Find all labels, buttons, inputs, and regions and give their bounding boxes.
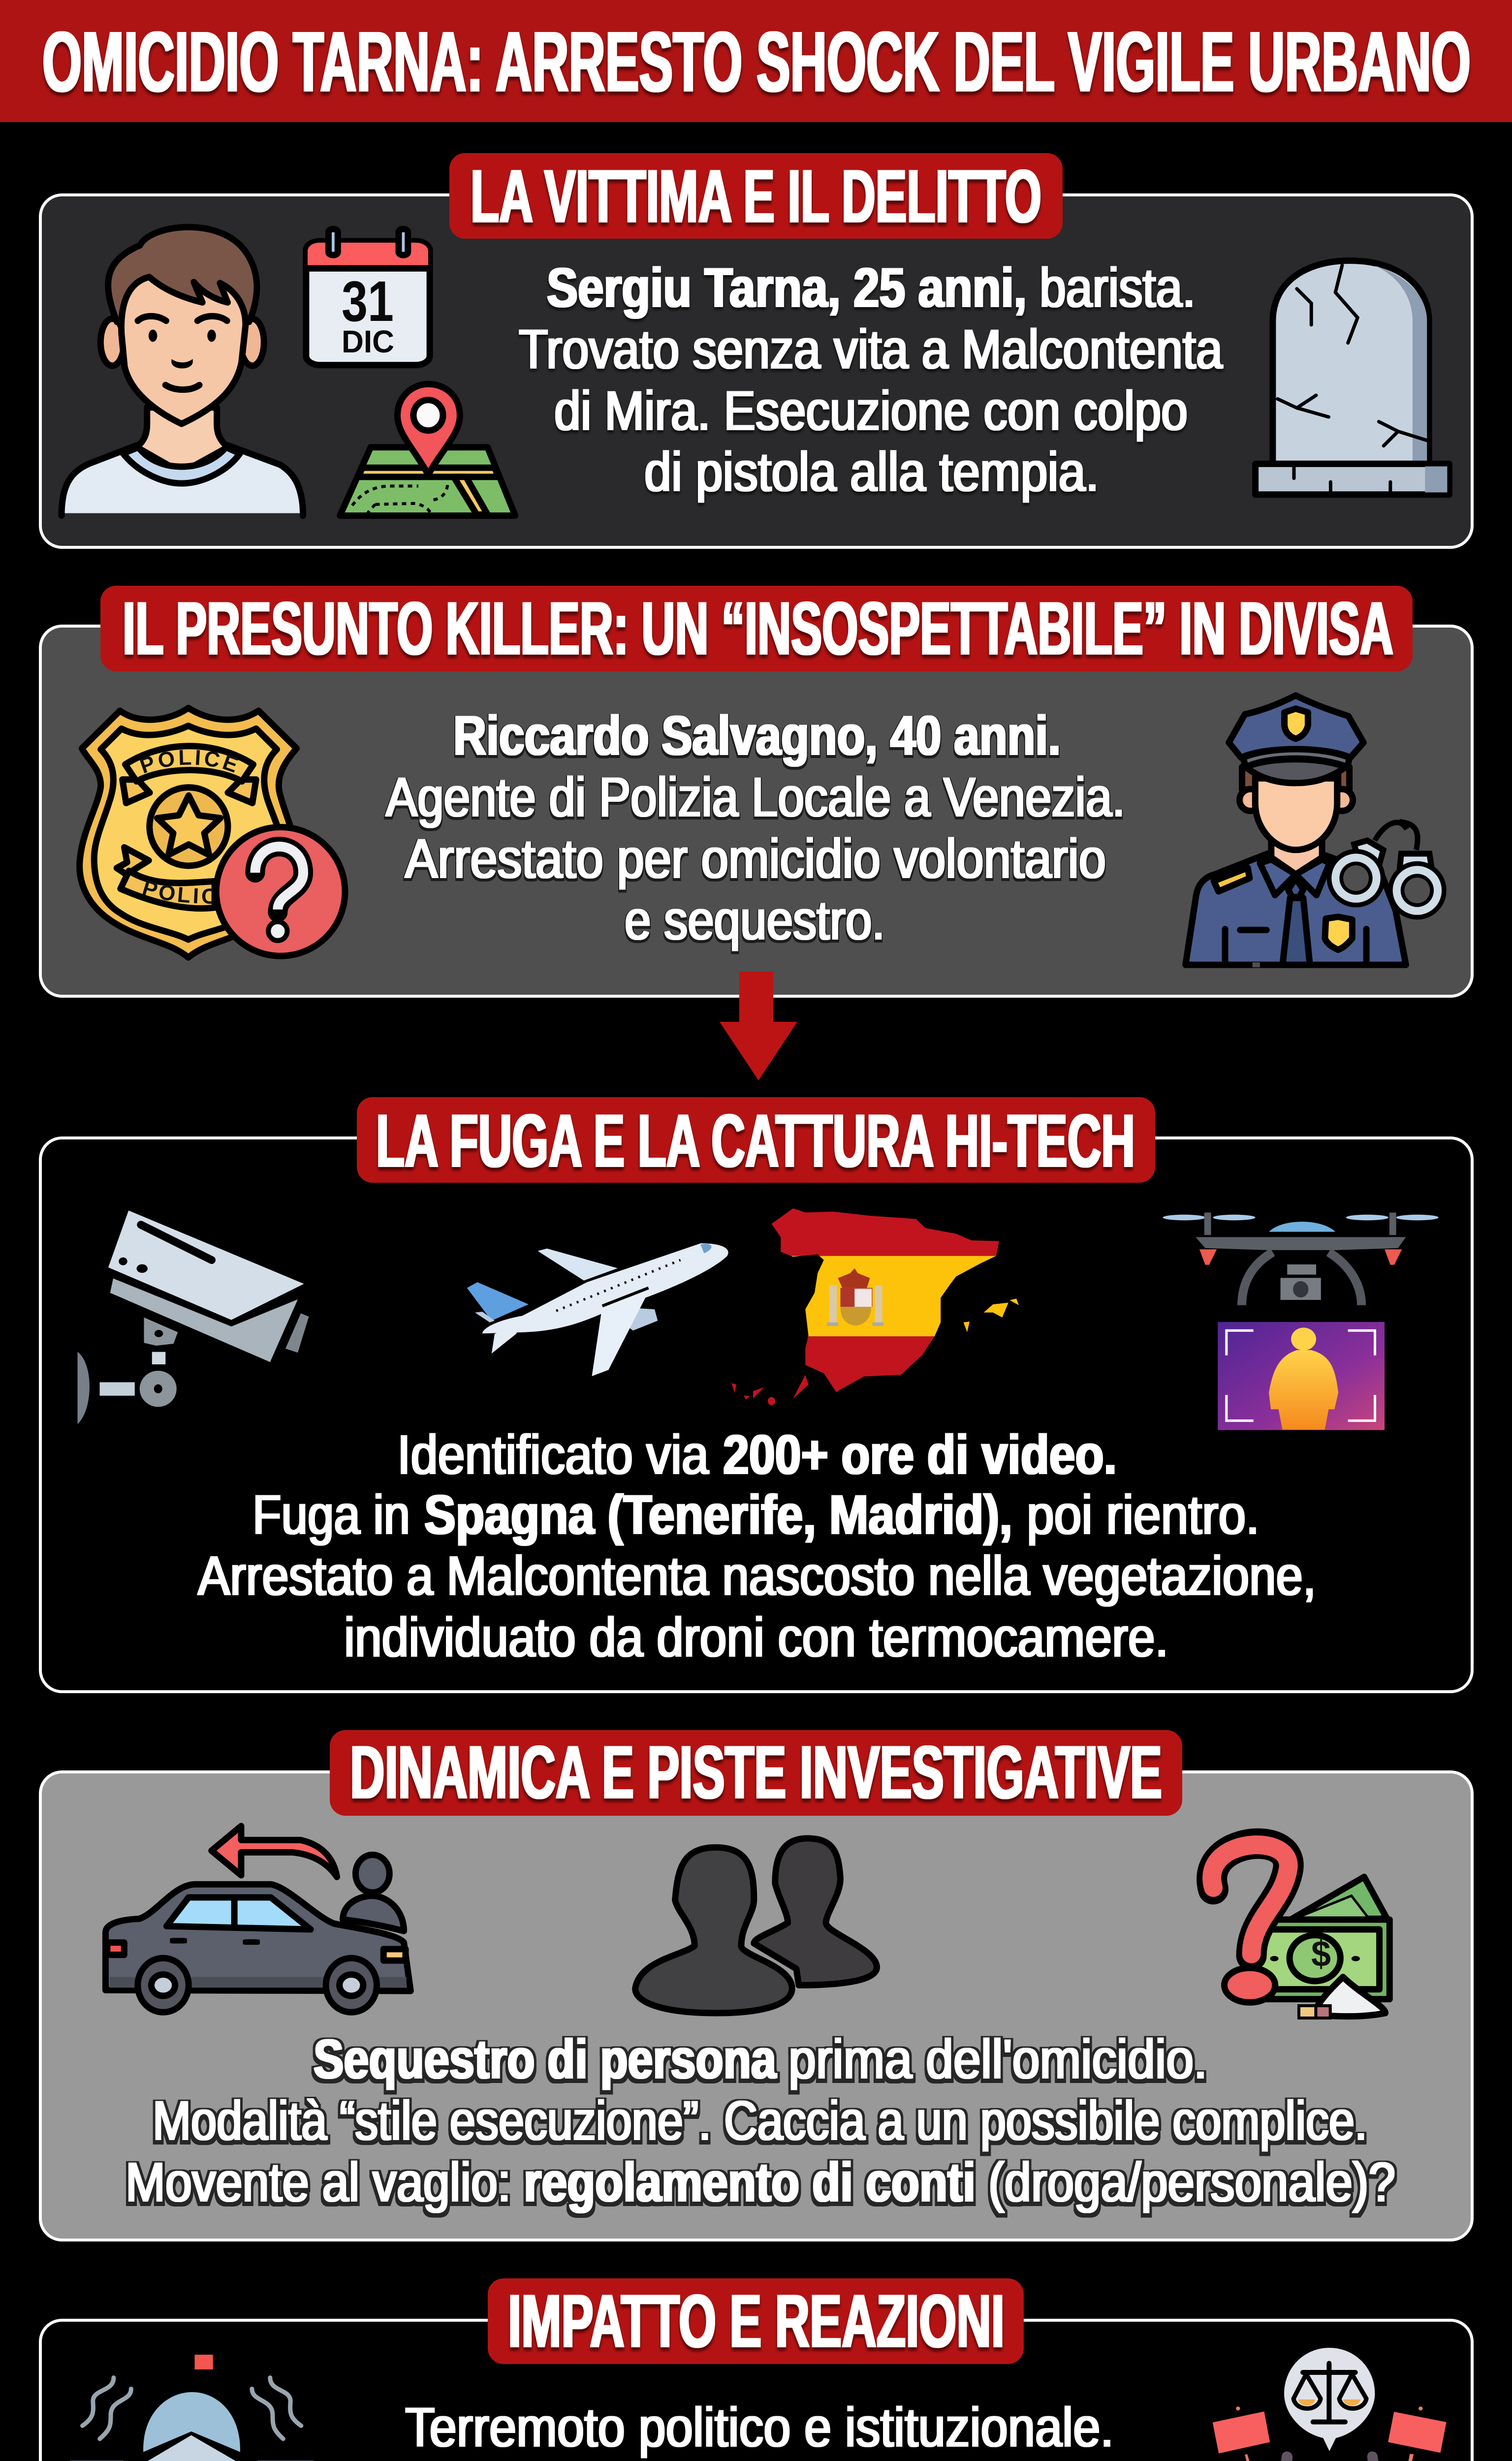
text: suspect description: Riccardo Salvagno, 40 anni. bbox=[453, 705, 1061, 766]
heading: la vittima bbox=[449, 153, 1063, 239]
icon: surveillance camera bbox=[78, 1210, 309, 1424]
text: escape and capture bbox=[198, 1424, 1316, 1668]
panel: il presunto killer bbox=[39, 586, 1474, 998]
text: dynamics and leads: (droga/personale)? bbox=[988, 2151, 1395, 2213]
heading: la fuga bbox=[357, 1097, 1155, 1183]
icon: police badge with question mark bbox=[76, 705, 348, 961]
text: dynamics and leads bbox=[126, 2028, 1395, 2213]
text: victim description: di pistola alla tempia. bbox=[644, 441, 1099, 503]
panel: la vittima e il delitto bbox=[40, 153, 1472, 547]
text: escape and capture: Fuga in bbox=[252, 1484, 410, 1546]
text: escape and capture: Spagna (Tenerife, Madrid), bbox=[424, 1484, 1012, 1546]
heading: la vittima: LA VITTIMA E IL DELITTO bbox=[471, 155, 1041, 238]
icon: airplane bbox=[467, 1243, 728, 1376]
icon: protesting crowd with justice scales bbox=[1213, 2348, 1447, 2461]
icon: calendar 31 dic: 31 bbox=[342, 269, 394, 333]
text: escape and capture: Identificato via bbox=[397, 1424, 709, 1485]
icon: cracked gravestone bbox=[1256, 261, 1449, 495]
panel: dinamica e piste investigative bbox=[40, 1730, 1472, 2240]
icon: two silhouettes bbox=[635, 1838, 877, 2013]
text: victim description: Sergiu Tarna, 25 anni, bbox=[547, 257, 1027, 318]
text: dynamics and leads: regolamento di conti bbox=[524, 2151, 976, 2213]
panel: la fuga e la cattura hi-tech bbox=[40, 1097, 1472, 1692]
icon: police badge with question mark: POLICE bbox=[143, 880, 214, 904]
text: escape and capture: poi rientro. bbox=[1027, 1484, 1260, 1546]
text: suspect description bbox=[386, 705, 1125, 951]
icon: police badge with question mark: POLICE bbox=[140, 750, 238, 773]
icon: car, arrow and person bbox=[105, 1826, 410, 2012]
text: victim description: Trovato senza vita a Malcontenta bbox=[519, 318, 1223, 380]
text: victim description: barista. bbox=[1040, 257, 1196, 318]
icon: map with location pin bbox=[340, 384, 515, 516]
icon text: dollar sign: $ bbox=[1311, 1933, 1331, 1974]
icon: calendar 31 dic bbox=[306, 229, 430, 365]
text: escape and capture: individuato da droni con termocamere. bbox=[344, 1607, 1168, 1668]
text: escape and capture: Arrestato a Malcontenta nascosto nella vegetazione, bbox=[198, 1545, 1316, 1607]
text: dynamics and leads: Movente al vaglio: bbox=[126, 2151, 511, 2213]
icon: young man portrait bbox=[62, 227, 303, 516]
text: victim description bbox=[519, 257, 1223, 503]
heading: impatto bbox=[488, 2278, 1024, 2364]
arrow: down bbox=[720, 972, 797, 1080]
text: suspect description: Agente di Polizia Locale a Venezia. bbox=[386, 766, 1125, 828]
panel: impatto e reazioni bbox=[40, 2278, 1472, 2461]
text: impact and reactions: Terremoto politico e istituzionale. bbox=[405, 2397, 1114, 2458]
icon: drone bbox=[1163, 1213, 1439, 1305]
icon: thermal camera view bbox=[1218, 1322, 1385, 1430]
icon: question mark, cash and powder bbox=[1212, 1844, 1389, 2018]
icon: police officer with handcuffs bbox=[1186, 695, 1447, 965]
text: victim description: di Mira. Esecuzione con colpo bbox=[554, 380, 1188, 442]
icon: institutional building shaken bbox=[70, 2355, 314, 2461]
text: dynamics and leads: prima dell'omicidio. bbox=[788, 2028, 1207, 2090]
text: suspect description: Arrestato per omicidio volontario bbox=[405, 828, 1106, 889]
icon: calendar 31 dic: DIC bbox=[342, 324, 394, 359]
text: escape and capture: 200+ ore di video. bbox=[723, 1424, 1117, 1485]
heading: dinamica bbox=[330, 1730, 1182, 1816]
heading: impatto: IMPATTO E REAZIONI bbox=[508, 2279, 1005, 2363]
text: dynamics and leads: Sequestro di persona bbox=[314, 2028, 777, 2090]
text: suspect description: e sequestro. bbox=[625, 889, 885, 951]
icon: spain map with flag bbox=[731, 1207, 1019, 1405]
